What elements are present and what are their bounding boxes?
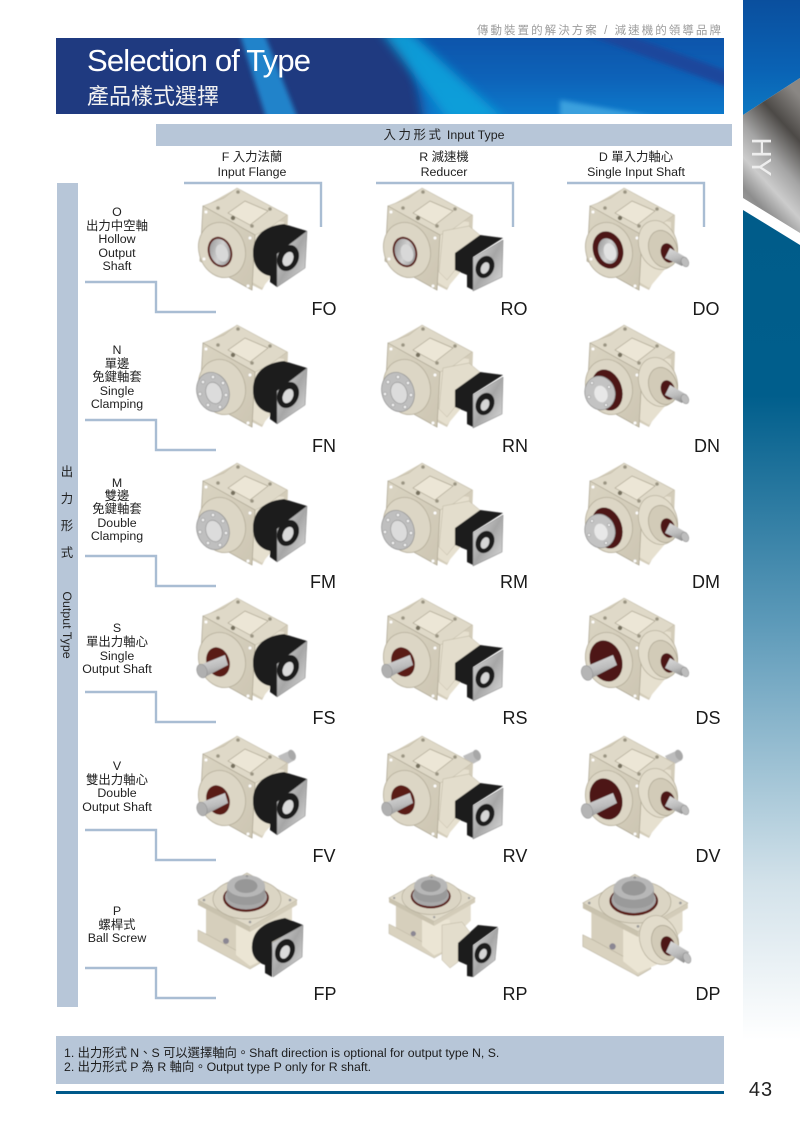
gearbox FO (191, 188, 307, 290)
row label: M (85, 476, 216, 586)
code DO: DO (692, 299, 720, 319)
gearbox DN (578, 325, 690, 427)
gearbox DM (578, 463, 690, 565)
output type bar: 形 (61, 519, 73, 533)
gearbox RM (376, 463, 503, 566)
column header: F (184, 150, 321, 227)
code RN: RN (502, 436, 528, 456)
output type bar: 出 (61, 465, 73, 479)
code RS: RS (502, 708, 528, 728)
gearbox FS (191, 598, 307, 700)
row label: N: Single (100, 384, 134, 398)
row label: M: 免鍵軸套 (92, 501, 142, 516)
code FM: FM (310, 572, 336, 592)
row label: V: Double (97, 786, 137, 800)
row label: P: P (113, 904, 121, 918)
code FP: FP (313, 984, 337, 1004)
row label: N: 免鍵軸套 (92, 369, 142, 384)
code FV: FV (312, 846, 336, 866)
input type bar: 入力形式 Input Type (383, 128, 505, 142)
row label: N: 單邊 (105, 357, 130, 371)
row label: O (85, 205, 216, 312)
column header: F: Input Flange (218, 165, 287, 179)
column header: D: D 單入力軸心 (599, 150, 673, 164)
gearbox DP (583, 874, 692, 976)
column header: R: Reducer (421, 165, 467, 179)
code RO: RO (500, 299, 528, 319)
gearbox RV (376, 736, 503, 839)
note 2: 2. 出力形式 P 為 R 軸向。Output type P only for R shaft. (64, 1059, 371, 1074)
title banner (56, 38, 724, 114)
gearbox FP (198, 873, 303, 977)
output type bar: 力 (61, 492, 73, 506)
gearbox DV (578, 736, 690, 838)
output type bar: 式 (61, 546, 73, 560)
gearbox RS (376, 598, 503, 701)
output type bar: Output Type (60, 591, 74, 659)
row label: O: Shaft (103, 259, 132, 273)
row label: V: V (113, 759, 122, 773)
gearbox RO (376, 188, 503, 291)
gearbox FM (191, 463, 307, 565)
top slogan: 傳動裝置的解決方案 / 減速機的領導品牌 (477, 23, 723, 37)
row label: O: O (112, 205, 122, 219)
title: Selection of Type (87, 43, 311, 78)
code RM: RM (500, 572, 528, 592)
side tab label: HY (746, 138, 777, 177)
row label: S: S (113, 621, 121, 635)
gearbox DS (578, 598, 690, 700)
row label: V (82, 759, 216, 860)
row label: P: 螺桿式 (98, 917, 136, 932)
row label: S: Output Shaft (82, 662, 152, 676)
output type bar (57, 183, 78, 1007)
row label: O: 出力中空軸 (86, 218, 148, 233)
row label: O: Output (98, 246, 136, 260)
column header: F: F 入力法蘭 (222, 150, 282, 164)
row label: N (85, 343, 216, 450)
column header: D (567, 150, 704, 227)
row label: S: 單出力軸心 (86, 635, 148, 649)
code RV: RV (503, 846, 527, 866)
gearbox RP (389, 875, 498, 977)
row label: M: 雙邊 (105, 488, 130, 503)
code FN: FN (312, 436, 336, 456)
column header: R: R 減速機 (419, 149, 469, 164)
row label: V: Output Shaft (82, 800, 152, 814)
row label: M: M (112, 476, 122, 490)
gearbox DO (578, 188, 690, 290)
code FS: FS (312, 708, 336, 728)
page number: 43 (749, 1079, 773, 1101)
code DS: DS (695, 708, 721, 728)
column header: D: Single Input Shaft (587, 165, 685, 179)
row label: N: Clamping (91, 397, 143, 411)
row label: M: Double (97, 516, 137, 530)
code FO: FO (312, 299, 336, 319)
input type bar (156, 124, 732, 146)
gearbox RN (376, 325, 503, 428)
code DM: DM (692, 572, 720, 592)
code DP: DP (695, 984, 721, 1004)
code RP: RP (502, 984, 528, 1004)
column header: R (376, 149, 513, 227)
notes panel (56, 1036, 724, 1084)
row label: S (82, 621, 216, 722)
row label: N: N (113, 343, 121, 357)
row label: M: Clamping (91, 529, 143, 543)
row label: V: 雙出力軸心 (86, 772, 148, 787)
gearbox FN (191, 325, 307, 427)
footer rule (56, 1091, 724, 1094)
right side strip (743, 0, 800, 1040)
note 1: 1. 出力形式 N、S 可以選擇軸向。Shaft direction is optional for output type N, S. (64, 1045, 499, 1060)
row label: S: Single (100, 649, 134, 663)
code DN: DN (694, 436, 720, 456)
row label: P (85, 904, 216, 998)
subtitle: 產品樣式選擇 (87, 84, 219, 109)
row label: P: Ball Screw (88, 931, 146, 945)
code DV: DV (695, 846, 721, 866)
gearbox FV (191, 736, 307, 838)
row label: O: Hollow (98, 232, 136, 246)
